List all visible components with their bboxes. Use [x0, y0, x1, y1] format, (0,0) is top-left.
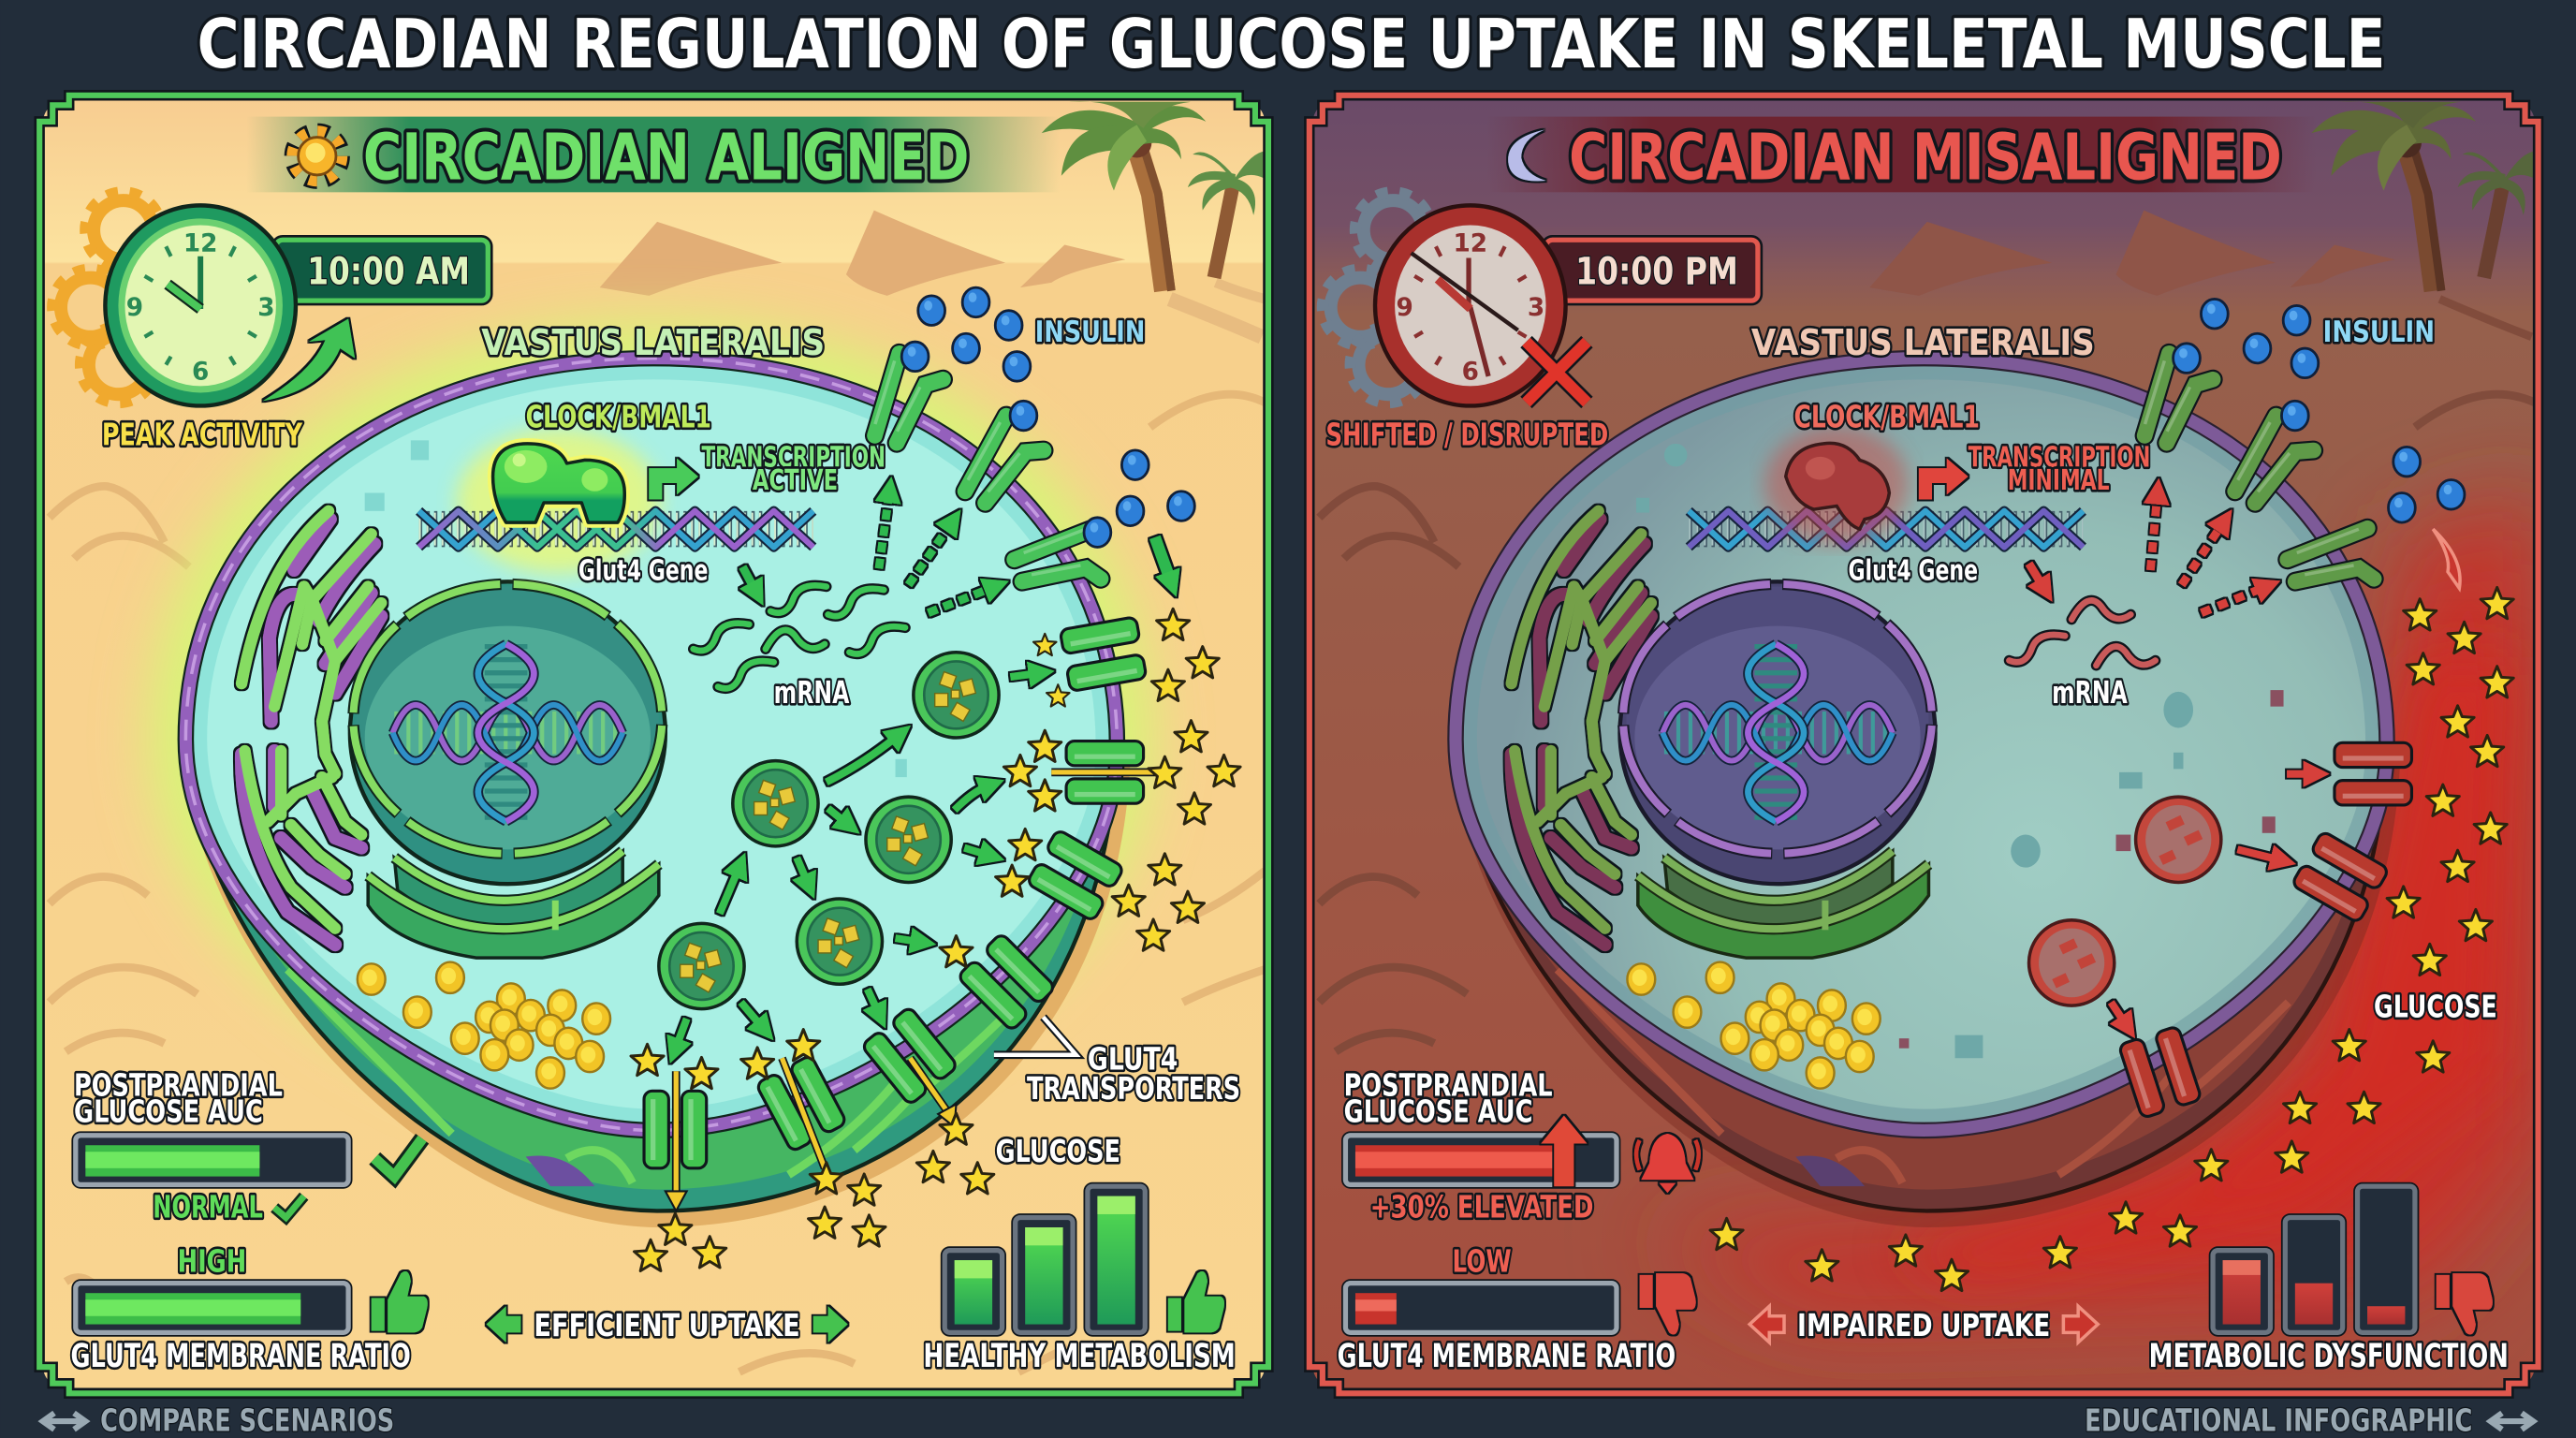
panel background: dusk desert [1306, 94, 2543, 1395]
label: glut4 gene: Glut4 Gene [578, 555, 708, 588]
nucleus [1620, 581, 1935, 884]
icon: thumbs up [372, 1271, 428, 1332]
metric: postprandial glucose AUC: POSTPRANDIAL [74, 1067, 283, 1104]
metric: postprandial glucose AUC: GLUCOSE AUC [1344, 1093, 1532, 1130]
footer left: compare scenarios [43, 1402, 394, 1438]
icon: red X [1526, 342, 1587, 403]
arrow: failed insulin signal [2433, 529, 2460, 588]
cytoplasm and membrane [1456, 359, 2387, 1130]
glucose channels [666, 772, 1164, 1211]
icon: transcription arrow [1919, 459, 1969, 500]
cell: vastus lateralis (aligned) [185, 287, 1240, 1271]
bar chart: metabolic dysfunction [2149, 1186, 2509, 1375]
cell: vastus lateralis (misaligned) [1456, 299, 2513, 1291]
heading: circadian misaligned: CIRCADIAN MISALIGNED [1569, 120, 2282, 195]
icon: sun [292, 131, 342, 181]
label: insulin: INSULIN [2323, 315, 2435, 349]
footer left: compare scenarios: COMPARE SCENARIOS [100, 1402, 394, 1438]
insulin receptors [2143, 351, 2390, 612]
icon: thumbs up [1168, 1271, 1224, 1332]
panel: circadian misaligned [1306, 94, 2543, 1395]
insulin molecules [2174, 299, 2465, 522]
insulin molecules [901, 287, 1194, 547]
callout: GLUT4 transporters: TRANSPORTERS [1027, 1070, 1240, 1107]
label: transcription minimal: TRANSCRIPTION [1969, 441, 2150, 474]
label: glucose: GLUCOSE [996, 1133, 1120, 1169]
metric: GLUT4 membrane ratio [1338, 1242, 1696, 1375]
panel frame [1310, 95, 2539, 1393]
icon: rising arrow [263, 318, 355, 401]
callout: GLUT4 transporters: GLUT4 [1088, 1041, 1178, 1078]
glow behind gene [457, 429, 661, 574]
label: clock/bmal1: CLOCK/BMAL1 [1794, 398, 1980, 434]
label: mRNA: mRNA [774, 674, 850, 711]
panel background: desert [37, 94, 1273, 1395]
glucose molecules [1710, 587, 2513, 1291]
label: normal: NORMAL [153, 1188, 263, 1225]
icon: thumbs down [1640, 1273, 1696, 1334]
label: +30% elevated: +30% ELEVATED [1370, 1188, 1593, 1225]
endoplasmic reticulum [1512, 511, 1651, 945]
time badge [276, 240, 488, 301]
signal arrows [742, 496, 1170, 613]
vesicle traffic arrows [2111, 774, 2310, 1022]
metric: postprandial glucose AUC [74, 1067, 422, 1225]
palm trees [2311, 101, 2543, 291]
cell lower wall [1456, 731, 2400, 1227]
label: insulin: INSULIN [1035, 315, 1145, 349]
banner: circadian misaligned [1486, 117, 2317, 195]
mRNA strands [694, 585, 905, 688]
GLUT4 vesicles [659, 653, 999, 1009]
label: transcription minimal [1969, 441, 2150, 497]
time badge: 10:00 AM [307, 250, 470, 294]
GLUT4 transporters (few) [2118, 742, 2411, 1119]
glucose molecules [631, 609, 1240, 1271]
mRNA strands [2009, 600, 2156, 666]
icon: alarm bell [1636, 1134, 1699, 1193]
protein: CLOCK/BMAL1 [1764, 426, 1909, 544]
label: transcription minimal: MINIMAL [2008, 464, 2110, 497]
clock face: 3 [257, 294, 275, 322]
clock face [1375, 205, 1587, 405]
clock: 10:00 PM [1323, 192, 1758, 453]
signal arrows [2029, 498, 2262, 613]
metric: GLUT4 membrane ratio: GLUT4 MEMBRANE RATIO [71, 1337, 411, 1375]
cytoplasm and membrane [185, 359, 1117, 1130]
metric: GLUT4 membrane ratio: HIGH [178, 1242, 246, 1279]
label: vastus lateralis: VASTUS LATERALIS [1751, 322, 2095, 364]
label: peak activity: PEAK ACTIVITY [102, 417, 303, 453]
label: glut4 gene: Glut4 Gene [1848, 555, 1978, 588]
label: vastus lateralis: VASTUS LATERALIS [481, 322, 825, 364]
panel frame [39, 95, 1268, 1393]
clock: 10:00 AM [52, 192, 488, 453]
cell lower wall [185, 731, 1131, 1227]
icon: moon [1508, 130, 1546, 181]
clock face: 6 [192, 358, 209, 386]
label: shifted / disrupted: SHIFTED / DISRUPTED [1325, 417, 1608, 453]
vesicle traffic arrows [677, 674, 1035, 1045]
clock face: 12 [183, 230, 217, 258]
rough ER [368, 851, 659, 958]
heading: circadian aligned: CIRCADIAN ALIGNED [363, 120, 970, 195]
icon: up arrow [1541, 1116, 1587, 1186]
nucleus [350, 581, 666, 884]
clock face: 12 [1453, 230, 1487, 258]
metric: GLUT4 membrane ratio: LOW [1453, 1242, 1512, 1279]
clock face: 9 [126, 294, 143, 322]
rough ER [1638, 851, 1928, 958]
metric: GLUT4 membrane ratio [71, 1242, 428, 1375]
metric: postprandial glucose AUC [1344, 1067, 1699, 1225]
label: clock/bmal1: CLOCK/BMAL1 [526, 398, 711, 434]
label: impaired uptake: IMPAIRED UPTAKE [1797, 1307, 2050, 1343]
banner: circadian aligned [246, 117, 1060, 195]
icon: transcription arrow [649, 459, 698, 500]
insulin receptors [872, 351, 1117, 612]
gene: Glut4 [1689, 511, 2083, 547]
nuclear DNA [1662, 644, 1893, 822]
glycogen granules [358, 962, 610, 1089]
label: transcription active: ACTIVE [753, 464, 838, 497]
label: glucose: GLUCOSE [2374, 988, 2497, 1024]
label: mRNA: mRNA [2052, 674, 2128, 711]
label: transcription active [701, 441, 886, 497]
time badge [1546, 240, 1758, 301]
label: transcription active: TRANSCRIPTION [701, 441, 886, 474]
panel: circadian aligned [37, 94, 1273, 1395]
metric: postprandial glucose AUC: POSTPRANDIAL [1344, 1067, 1553, 1104]
endoplasmic reticulum [242, 511, 381, 945]
palm trees [1042, 101, 1273, 291]
clock face: 9 [1396, 294, 1413, 322]
protein: CLOCK/BMAL1 [493, 444, 624, 522]
clock face [105, 205, 296, 405]
callout: GLUT4 transporters [994, 1017, 1240, 1107]
icon: thumbs down [2437, 1273, 2493, 1334]
gene: Glut4 [419, 511, 813, 547]
icon: check [374, 1138, 422, 1177]
bar chart: healthy metabolism: HEALTHY METABOLISM [923, 1337, 1236, 1375]
GLUT4 vesicles (few) [2029, 797, 2221, 1005]
metric: GLUT4 membrane ratio: GLUT4 MEMBRANE RATIO [1338, 1337, 1676, 1375]
metric: postprandial glucose AUC: GLUCOSE AUC [74, 1093, 263, 1130]
clock face: 6 [1462, 358, 1479, 386]
GLUT4 transporters [644, 617, 1147, 1168]
nuclear DNA [393, 644, 622, 822]
glycogen granules [1627, 962, 1881, 1089]
bar chart: healthy metabolism [923, 1186, 1236, 1375]
label: efficient uptake: EFFICIENT UPTAKE [534, 1307, 800, 1343]
clock face: 3 [1528, 294, 1544, 322]
time badge: 10:00 PM [1575, 250, 1738, 294]
